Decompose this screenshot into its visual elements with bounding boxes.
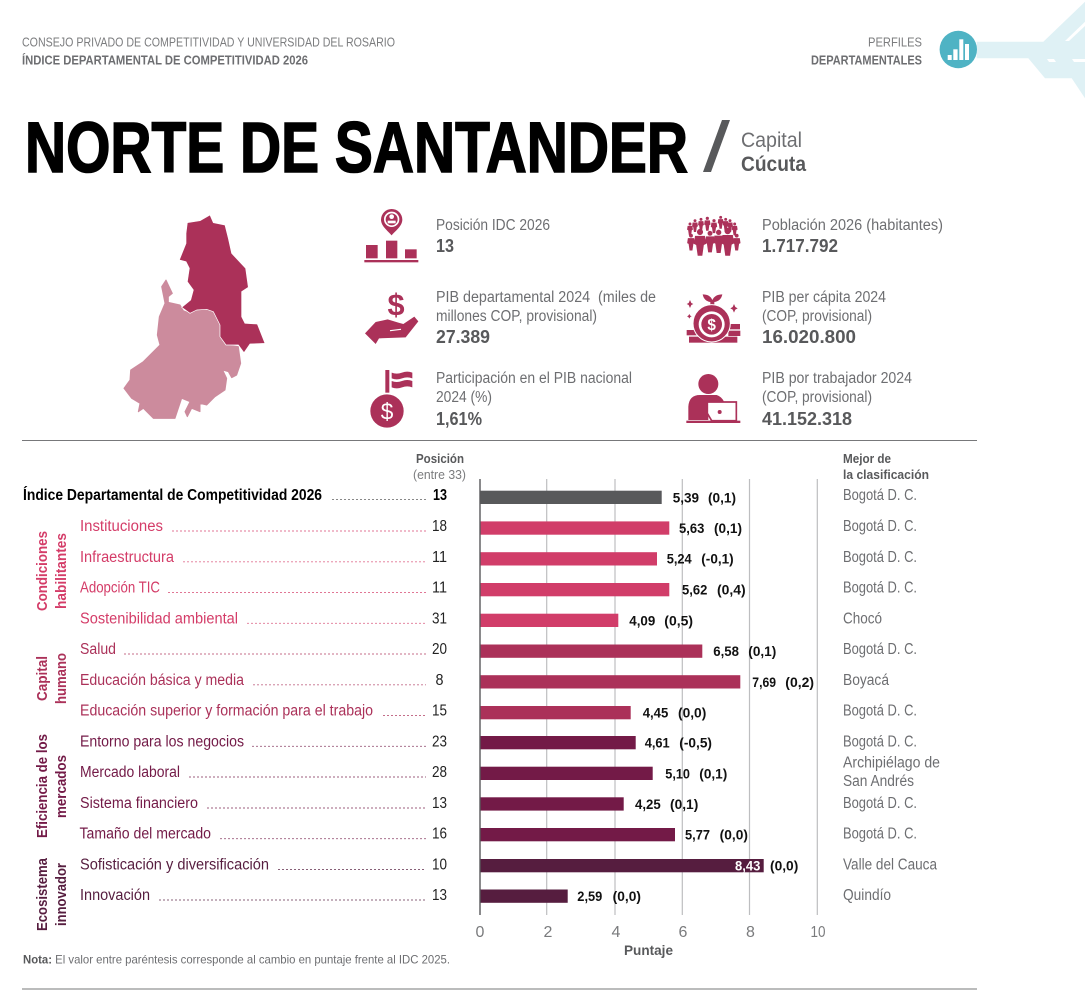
best-ranked column: Archipiélago de [843, 755, 940, 772]
bar: mercado laboral: 5,10 [665, 766, 690, 781]
row: Sofisticación y diversificación [80, 856, 447, 874]
side label: ecosistema innovador: Ecosistema [34, 857, 51, 931]
axis labels: 10 [810, 924, 826, 941]
stat: PIB departamental: 27.389 [436, 327, 490, 347]
row: Entorno para los negocios: Entorno para los negocios [80, 733, 244, 750]
stat: participación PIB nacional: 2024 (%) [436, 389, 492, 406]
row: Mercado laboral: 28 [432, 764, 447, 781]
map: Norte de Santander and Santander [124, 215, 265, 418]
stat: participación PIB nacional [436, 370, 632, 429]
row: Adopción TIC [80, 580, 447, 596]
side label: capital humano: Capital [34, 656, 51, 701]
bar: educación básica [480, 675, 814, 690]
stat: PIB departamental: millones COP, provisional) [436, 308, 597, 325]
column heading: posición: Posición [416, 451, 464, 466]
row: Sostenibilidad ambiental [80, 610, 447, 627]
stat: población: Población 2026 (habitantes) [762, 217, 943, 234]
axis title: Puntaje [624, 942, 673, 958]
column heading: posición [413, 451, 466, 482]
bar: sistema financiero: (0,1) [670, 797, 698, 812]
axis labels: 4 [612, 924, 621, 941]
row: índice general: 13 [433, 487, 447, 504]
best-ranked column: Chocó [843, 610, 882, 627]
row: Adopción TIC: Adopción TIC [80, 580, 160, 596]
stat: participación PIB nacional: 1,61% [436, 409, 482, 429]
row: Entorno para los negocios: 23 [432, 733, 447, 750]
stat: posición IDC: Posición IDC 2026 [436, 217, 550, 234]
bar: entorno negocios: 4,61 [645, 736, 670, 751]
side label: eficiencia de los mercados: mercados [53, 755, 70, 818]
row: Sistema financiero [80, 795, 447, 812]
best-ranked column: Bogotá D. C. [843, 549, 917, 566]
row: Sostenibilidad ambiental: 31 [432, 610, 447, 627]
header: source lines [22, 34, 395, 68]
icon: position podium [364, 209, 418, 262]
side label: ecosistema innovador: innovador [53, 863, 70, 926]
row: Educación superior: Educación superior y formación para el trabajo [80, 702, 373, 720]
side label: condiciones habilitantes [34, 531, 70, 611]
bar: índice: (0,1) [708, 490, 736, 505]
row: Educación básica y media: Educación básica y media [80, 672, 244, 689]
icon: crowd of people [687, 216, 741, 256]
row: Mercado laboral: Mercado laboral [80, 764, 180, 781]
header: source lines: CONSEJO PRIVADO DE COMPETITIVIDAD Y UNIVERSIDAD DEL ROSARIO [22, 34, 395, 50]
best-ranked column: San Andrés [843, 773, 914, 790]
header: source lines: ÍNDICE DEPARTAMENTAL DE COMPETITIVIDAD 2026 [22, 52, 308, 68]
row: Salud [80, 641, 447, 658]
row: Sistema financiero: 13 [432, 795, 447, 812]
bar: adopción TIC [480, 582, 746, 598]
icon: money bag with coins: $ [707, 317, 716, 334]
bar: salud [480, 644, 776, 659]
best-ranked column: Boyacá [843, 672, 889, 689]
row: Salud: Salud [80, 641, 116, 658]
bar: sistema financiero: 4,25 [635, 797, 661, 812]
bar: sostenibilidad ambiental [480, 613, 693, 628]
bar: sostenibilidad ambiental: 4,09 [629, 613, 655, 628]
bar: infraestructura [480, 552, 734, 567]
side label: eficiencia de los mercados [34, 734, 70, 838]
bar: educación superior: 4,45 [643, 706, 669, 720]
bar: entorno negocios: (-0,5) [679, 736, 712, 751]
best-ranked column [843, 487, 940, 904]
stat: posición IDC [436, 217, 550, 256]
side label: capital humano: humano [53, 653, 70, 704]
icon: hand with dollar [365, 288, 418, 344]
row: Tamaño del mercado: Tamaño del mercado [80, 826, 211, 843]
title slash [703, 120, 730, 172]
bar: infraestructura: 5,24 [667, 552, 692, 567]
side label: capital humano [34, 653, 70, 704]
row: Innovación: 13 [432, 887, 447, 904]
side label: eficiencia de los mercados: Eficiencia de los [34, 734, 51, 838]
stat: población [762, 217, 943, 256]
bar: adopción TIC: 5,62 [682, 582, 707, 598]
column heading: mejor de la clasificación: Mejor de [843, 451, 891, 466]
bar: infraestructura: (-0,1) [701, 552, 734, 567]
row: Tamaño del mercado: 16 [432, 826, 447, 843]
icon: hand with dollar: $ [387, 288, 405, 322]
stat: PIB per cápita: PIB per cápita 2024 [762, 289, 886, 306]
icon: bar chart logo [940, 31, 977, 68]
bar: salud: (0,1) [748, 644, 776, 659]
best-ranked column: Bogotá D. C. [843, 702, 917, 720]
bar: tamaño del mercado: (0,0) [720, 828, 748, 843]
bar: sofisticación [480, 858, 798, 874]
header: perfiles departamentales [811, 34, 922, 68]
row: Innovación [80, 887, 447, 904]
title: NORTE DE SANTANDER [25, 109, 688, 188]
bar: innovación: 2,59 [577, 889, 602, 904]
bar: índice [480, 490, 736, 505]
stat: participación PIB nacional: Participación en el PIB nacional [436, 370, 632, 387]
best-ranked column: Bogotá D. C. [843, 518, 917, 535]
row: Mercado laboral [80, 764, 447, 781]
best-ranked column: Bogotá D. C. [843, 826, 917, 843]
icon: flag with coin: $ [381, 398, 394, 424]
bar: instituciones [480, 521, 742, 536]
stat: PIB por trabajador: (COP, provisional) [762, 389, 872, 406]
row: Sostenibilidad ambiental: Sostenibilidad ambiental [80, 610, 238, 627]
best-ranked column: Valle del Cauca [843, 856, 937, 874]
bar: educación superior [480, 706, 706, 720]
row: Sistema financiero: Sistema financiero [80, 795, 198, 812]
row: Instituciones: 18 [432, 518, 447, 535]
axis labels [476, 924, 826, 941]
bar: sofisticación: 8,43 [735, 858, 761, 874]
row: Instituciones: Instituciones [80, 518, 163, 535]
bar chart [480, 479, 817, 915]
column heading: posición: (entre 33) [413, 467, 466, 482]
row: Infraestructura: Infraestructura [80, 549, 174, 566]
axis labels: 6 [679, 924, 688, 941]
best-ranked column: Quindío [843, 887, 891, 904]
best-ranked column: Bogotá D. C. [843, 733, 917, 750]
row: Innovación: Innovación [80, 887, 150, 904]
icon: money bag with coins [687, 294, 740, 343]
side label: condiciones habilitantes: habilitantes [53, 533, 70, 609]
bar: educación superior: (0,0) [678, 706, 706, 720]
capital: Cúcuta [741, 153, 806, 176]
stat: PIB per cápita: (COP, provisional) [762, 308, 872, 325]
stat: PIB departamental: PIB departamental 2024 (miles de [436, 289, 656, 306]
row: Tamaño del mercado [80, 826, 447, 843]
best-ranked column: Bogotá D. C. [843, 580, 917, 596]
row: Infraestructura: 11 [432, 549, 447, 566]
stat: PIB por trabajador: 41.152.318 [762, 409, 852, 429]
icon: flag with coin [370, 370, 412, 428]
bar: innovación: (0,0) [613, 889, 641, 904]
best-ranked column: Bogotá D. C. [843, 795, 917, 812]
best-ranked column: Bogotá D. C. [843, 641, 917, 658]
bar: adopción TIC: (0,4) [717, 582, 746, 598]
row: Sofisticación y diversificación: Sofisticación y diversificación [80, 856, 269, 874]
row: Infraestructura [80, 549, 447, 566]
header: perfiles departamentales: DEPARTAMENTALES [811, 52, 922, 68]
row: Educación superior: 15 [432, 702, 447, 720]
column heading: mejor de la clasificación [843, 451, 929, 482]
bar: instituciones: 5,63 [679, 521, 705, 536]
capital: Capital [741, 129, 802, 152]
header: perfiles departamentales: PERFILES [868, 34, 922, 50]
column heading: mejor de la clasificación: la clasificación [843, 467, 929, 482]
bar: sistema financiero [480, 797, 698, 812]
footnote: Nota: El valor entre paréntesis corresponde al cambio en puntaje frente al IDC 2025. [23, 952, 450, 966]
row: Instituciones [80, 518, 447, 535]
axis labels: 0 [476, 924, 485, 941]
row: Educación básica y media [80, 672, 444, 689]
bar: índice: 5,39 [673, 490, 699, 505]
bar: educación básica: (0,2) [785, 675, 814, 690]
bar: mercado laboral: (0,1) [699, 766, 727, 781]
bar: innovación [480, 889, 641, 904]
bar: educación básica: 7,69 [752, 675, 776, 690]
axis labels: 2 [544, 924, 553, 941]
row: Adopción TIC: 11 [432, 580, 447, 596]
row: Entorno para los negocios [80, 733, 447, 750]
bar: salud: 6,58 [713, 644, 739, 659]
stat: población: 1.717.792 [762, 236, 838, 256]
bar: tamaño del mercado [480, 828, 748, 843]
capital [741, 129, 806, 176]
bar: tamaño del mercado: 5,77 [685, 828, 710, 843]
axis labels: 8 [746, 924, 755, 941]
icon: person with laptop [686, 374, 740, 423]
bar: sofisticación: (0,0) [770, 858, 798, 874]
bar: sostenibilidad ambiental: (0,5) [664, 613, 693, 628]
bar: instituciones: (0,1) [714, 521, 742, 536]
stat: PIB per cápita: 16.020.800 [762, 327, 856, 347]
row: Sofisticación y diversificación: 10 [432, 856, 447, 874]
stat: PIB por trabajador [762, 370, 912, 429]
row: Educación básica y media: 8 [436, 672, 444, 689]
stat: PIB departamental [436, 289, 656, 347]
background decoration: road shape [977, 2, 1085, 98]
stat: posición IDC: 13 [436, 236, 454, 256]
bar: entorno negocios [480, 736, 712, 751]
row: índice general: Índice Departamental de Competitividad 2026 [23, 487, 322, 504]
best-ranked column: Bogotá D. C. [843, 487, 917, 504]
side label: condiciones habilitantes: Condiciones [34, 531, 51, 611]
stat: PIB per cápita [762, 289, 886, 347]
stat: PIB por trabajador: PIB por trabajador 2024 [762, 370, 912, 387]
side label: ecosistema innovador [34, 857, 70, 931]
bar: mercado laboral [480, 766, 727, 781]
row: Salud: 20 [432, 641, 447, 658]
